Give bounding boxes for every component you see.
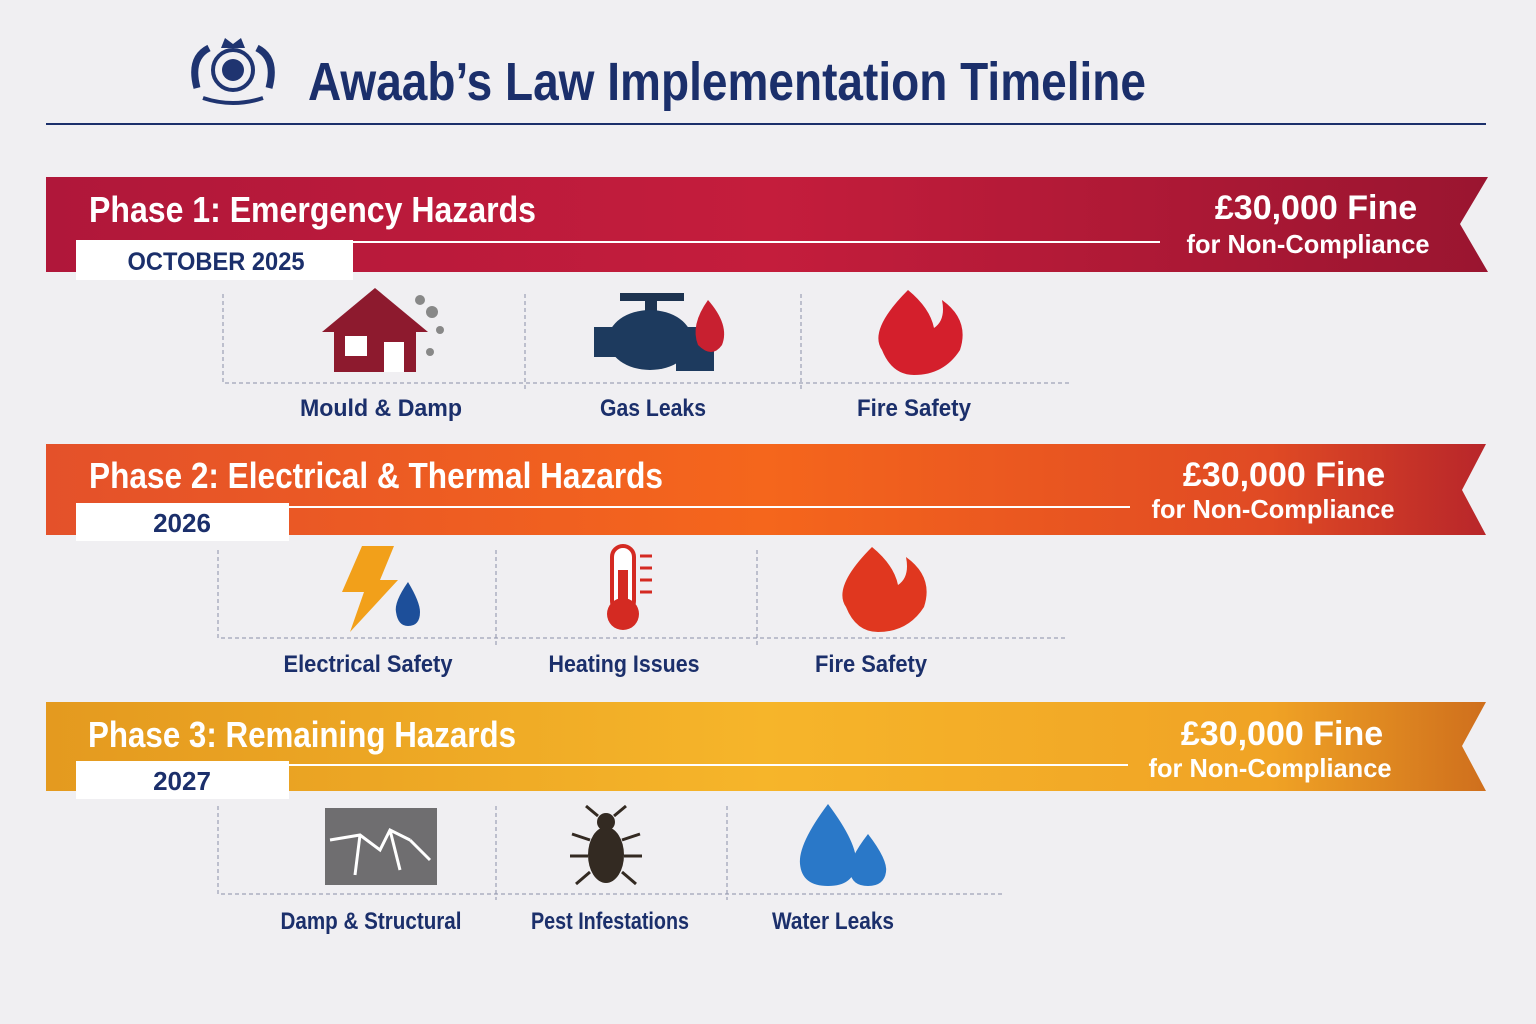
banner 1 [46,177,1488,272]
icon: cracked wall [325,808,437,885]
panel: phase 3: for Non-Compliance [1148,753,1392,783]
panel: phase 1: Gas Leaks [600,395,706,422]
panel: phase 3 [46,702,1486,935]
panel: phase 3: Phase 3: Remaining Hazards [88,714,516,755]
panel: phase 1: OCTOBER 2025 [128,248,305,276]
panel: phase 1 [46,177,1488,422]
banner 3 [46,702,1486,791]
panel: phase 3: 2027 [153,766,211,796]
panel: phase 3: Pest Infestations [531,908,689,935]
panel: phase 2: Fire Safety [815,651,928,678]
date box [76,761,289,799]
panel: phase 2: Phase 2: Electrical & Thermal Hazards [89,455,663,496]
banner 2 [46,444,1486,535]
icon: house mould [322,288,444,372]
fine: £30,000 Fine [1183,456,1385,494]
panel: phase 2: for Non-Compliance [1152,494,1394,524]
panel: phase 1: Phase 1: Emergency Hazards [89,189,536,230]
icon: thermometer [607,546,652,630]
panel: phase 1: Fire Safety [857,395,972,422]
icon: gas valve [594,293,724,371]
icon: beetle [570,806,642,884]
icon: lightning [342,546,420,632]
panel: phase 2 [46,444,1486,678]
title: Awaab’s Law Implementation Timeline [308,52,1146,112]
fine: £30,000 Fine [1215,189,1417,227]
date box [76,503,289,541]
date box [76,240,353,280]
panel: phase 3: Damp & Structural [280,908,462,935]
fine: £30,000 Fine [1181,715,1383,753]
panel: phase 2: 2026 [153,508,211,538]
icon: water drops [800,804,886,886]
icon: royal crest [195,38,271,103]
icon: fire [842,547,927,632]
icon: fire [878,290,963,375]
panel: phase 3: Water Leaks [772,908,894,935]
panel: phase 1: Mould & Damp [300,395,462,422]
panel: phase 1: for Non-Compliance [1186,229,1430,259]
panel: phase 2: Electrical Safety [284,651,453,678]
panel: phase 2: Heating Issues [548,651,700,678]
